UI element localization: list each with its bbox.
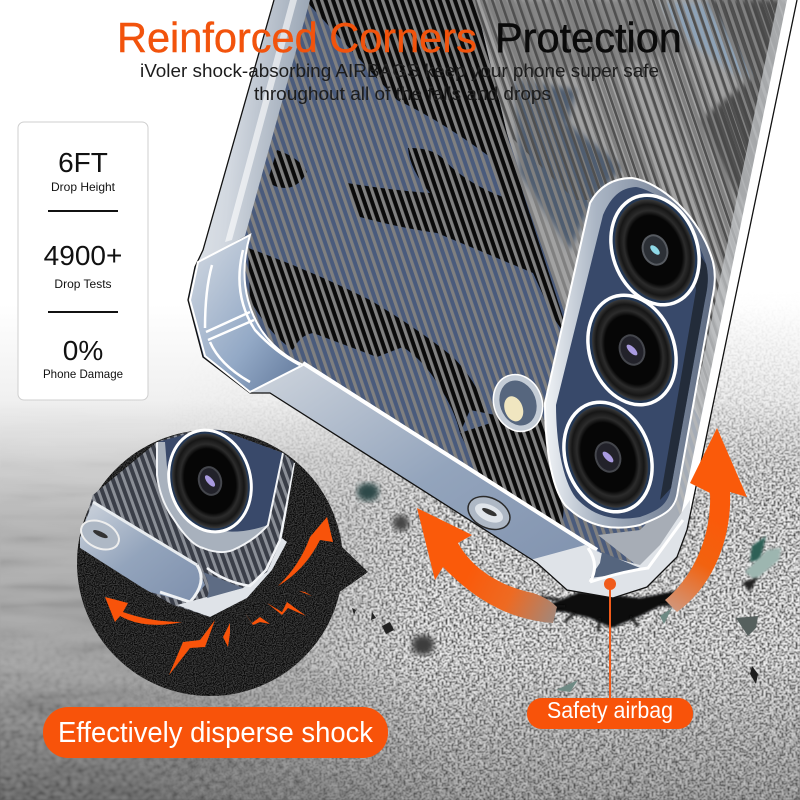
callout: effectively disperse shock: Effectively disperse shock xyxy=(58,717,373,749)
stats panel xyxy=(18,122,148,400)
inset strip xyxy=(76,502,205,603)
stat: drop tests xyxy=(44,240,122,291)
stat: phone damage: 0% xyxy=(63,335,103,366)
inset lens xyxy=(156,419,264,543)
top-left airbag corner xyxy=(190,235,303,392)
right clear frame xyxy=(674,0,787,516)
bottom clear strip xyxy=(252,363,600,560)
flash xyxy=(486,368,550,438)
lens 2 xyxy=(571,280,693,420)
lens 3 xyxy=(547,387,669,527)
inset phone corner xyxy=(80,428,295,617)
callout: safety airbag xyxy=(527,578,693,729)
lens 1 xyxy=(594,180,716,320)
phone back panel base xyxy=(189,4,706,564)
inset button xyxy=(76,515,124,555)
title: Reinforced Corners xyxy=(117,14,477,61)
upper-right lighter panel xyxy=(475,0,800,420)
title: Protection xyxy=(495,14,682,61)
debris around impact xyxy=(352,483,781,692)
subtitle: iVoler shock-absorbing AIRBAGS keep your phone super safe xyxy=(140,61,659,81)
light striped area by corner xyxy=(598,507,677,565)
inset arrows and shock bolts xyxy=(105,517,333,675)
orange arrow right xyxy=(665,428,747,612)
phone in clear case xyxy=(187,0,798,598)
orange arrow left xyxy=(417,508,557,623)
black camouflage bands xyxy=(248,0,572,560)
side button xyxy=(463,490,515,536)
inset bumper xyxy=(177,538,287,617)
stat: drop height: 6FT xyxy=(58,147,108,178)
black speech-bubble background xyxy=(70,425,370,700)
stat: phone damage xyxy=(43,335,123,381)
callout: safety airbag: Safety airbag xyxy=(547,697,673,723)
callout: effectively disperse shock xyxy=(43,707,388,758)
stat: drop height xyxy=(51,147,116,194)
inset module xyxy=(158,430,282,532)
background: white top fading into road surface xyxy=(0,315,800,800)
inset circle: shock dispersion close-up xyxy=(70,419,370,700)
stat: drop tests: Drop Tests xyxy=(54,277,112,291)
left clear frame xyxy=(198,0,310,260)
camera module xyxy=(545,178,716,528)
stat: phone damage: Phone Damage xyxy=(43,367,123,381)
subtitle xyxy=(140,61,659,104)
bottom-right airbag corner xyxy=(530,500,690,600)
stat: drop tests: 4900+ xyxy=(44,240,122,271)
subtitle: throughout all of the falls and drops xyxy=(254,84,551,104)
stat: drop height: Drop Height xyxy=(51,180,116,194)
carbon stripes xyxy=(188,0,786,563)
